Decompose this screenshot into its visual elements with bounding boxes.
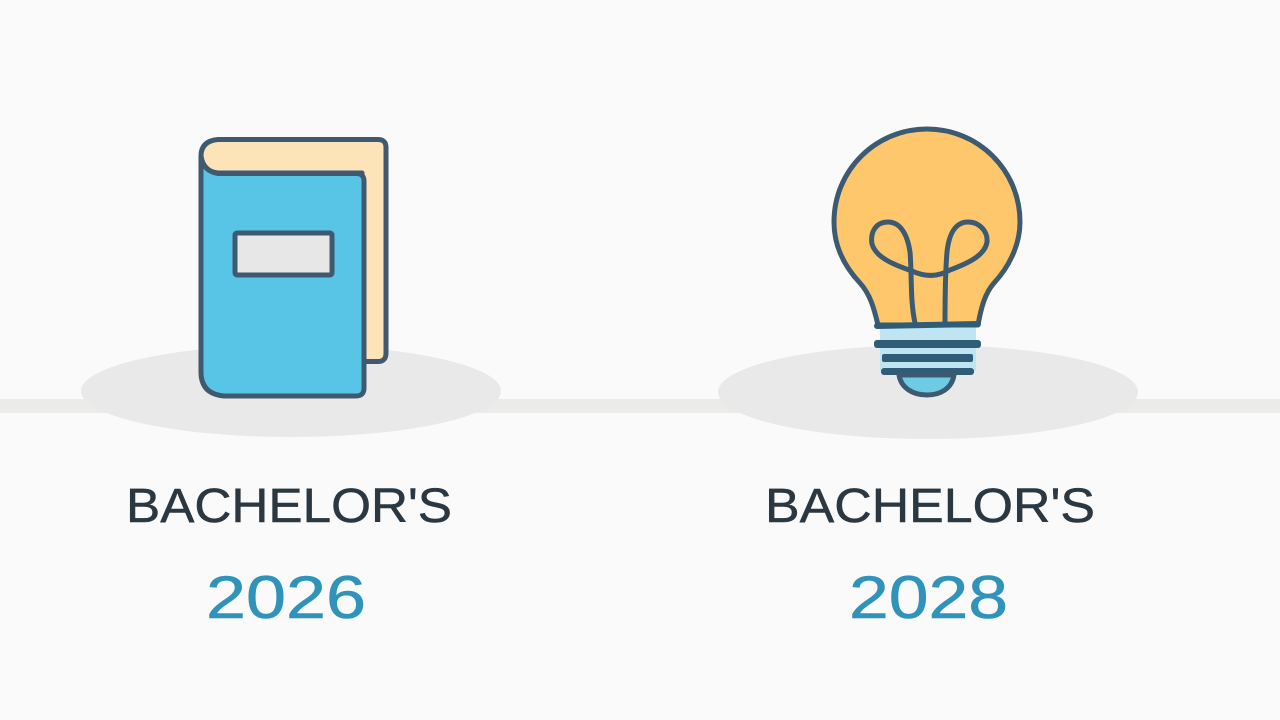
left milestone platform bbox=[81, 345, 501, 437]
label: right year: 2028 bbox=[849, 564, 1008, 631]
right milestone platform bbox=[718, 345, 1138, 439]
bulb tip bbox=[899, 375, 954, 395]
timeline line bbox=[0, 399, 1280, 413]
icon: book bbox=[201, 140, 386, 396]
bulb glass bbox=[834, 129, 1020, 325]
label: left year: 2026 bbox=[206, 564, 366, 631]
bulb filament bbox=[872, 222, 987, 323]
bulb base line bbox=[877, 324, 978, 326]
icon: light bulb bbox=[834, 129, 1020, 395]
book label bbox=[235, 233, 332, 275]
label: left heading: BACHELOR'S bbox=[126, 480, 452, 533]
book pages bbox=[201, 140, 386, 362]
book cover bbox=[201, 156, 364, 396]
bulb screw threads bbox=[874, 340, 981, 375]
label: right heading: BACHELOR'S bbox=[765, 480, 1095, 533]
bulb collar bbox=[880, 327, 976, 371]
